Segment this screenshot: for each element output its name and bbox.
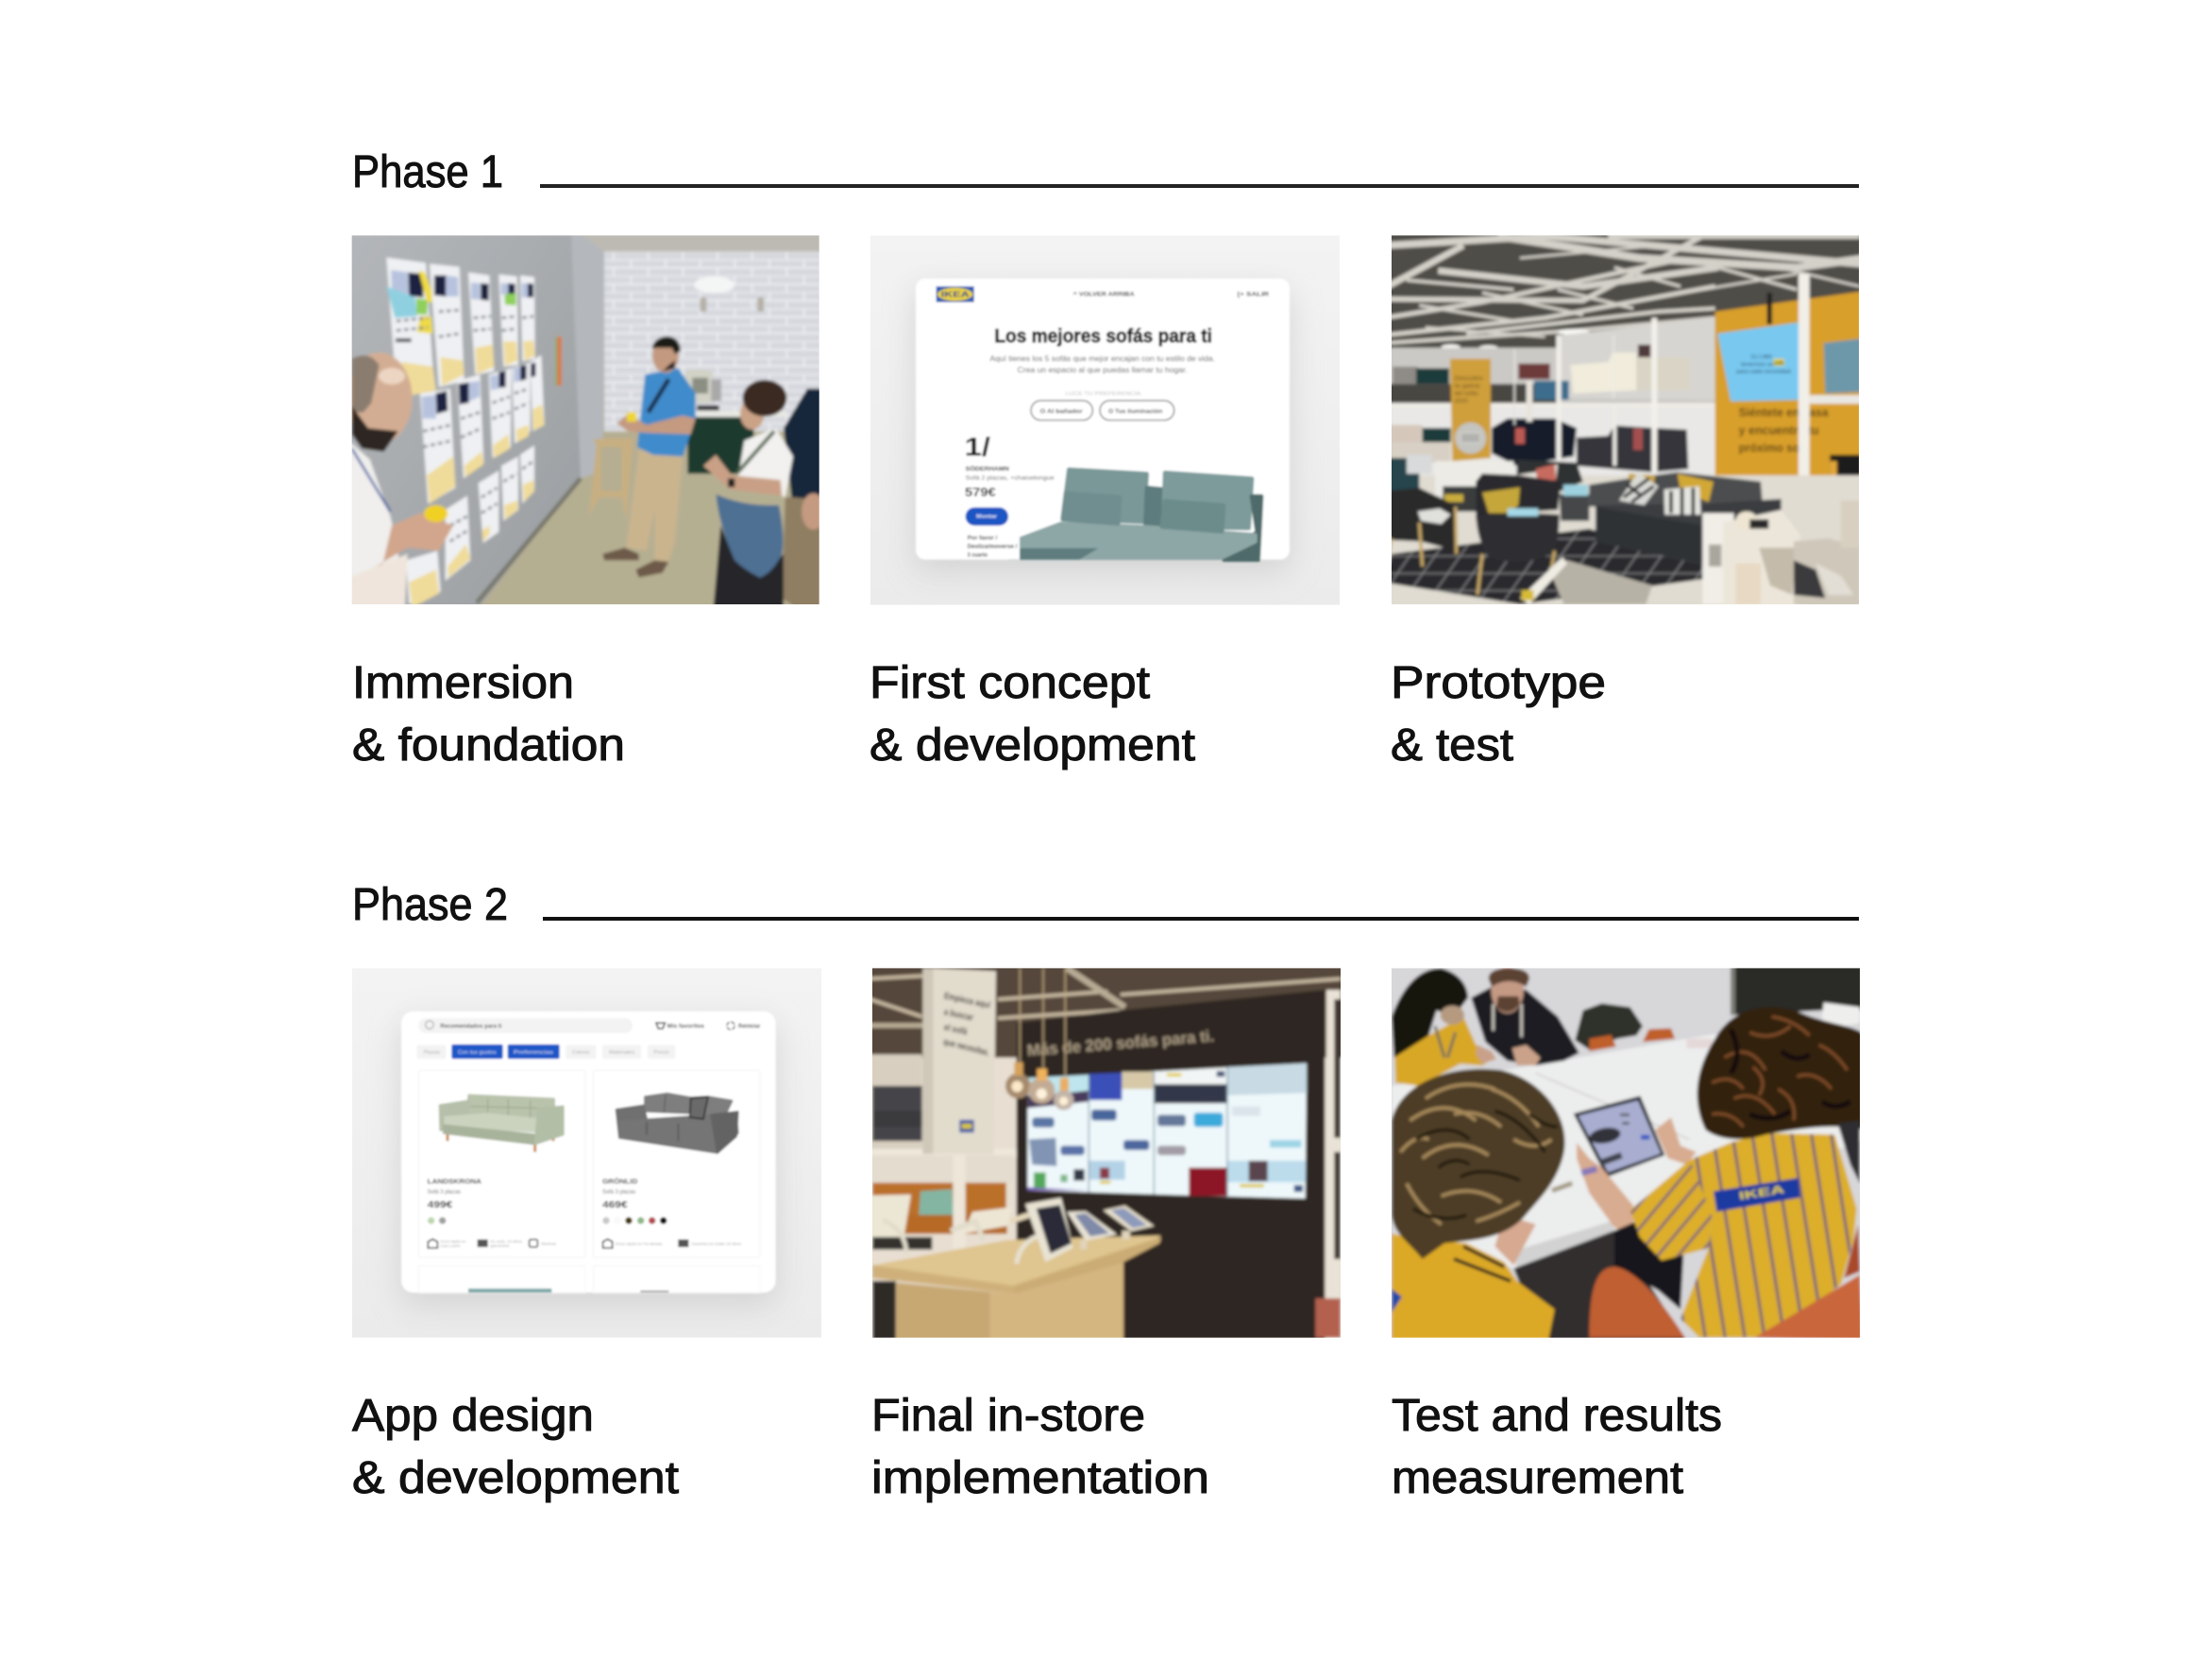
filter chips: Preferencias (514, 1050, 553, 1056)
photo: prototype in IKEA store showroom (1385, 227, 1866, 614)
app card: Crea un espacio al que puedas llamar tu hogar. (1018, 365, 1188, 374)
heading: Phase 1: Phase 1 (352, 147, 503, 197)
app card: SÖDERHAMN (966, 466, 1009, 473)
product card: LANDSKRONA: Su sofá, 10 años (490, 1239, 522, 1244)
caption: First concept & development: First concept (870, 658, 1150, 708)
IKEA logo (937, 286, 974, 302)
next row of product cards, cropped (466, 1287, 670, 1294)
app card: Por favor / (968, 535, 998, 541)
jacket and chairs behind table (1575, 1004, 1675, 1051)
caption: Prototype & test: & test (1391, 720, 1513, 771)
ceiling grid (1385, 227, 1866, 350)
search bar (418, 1018, 761, 1033)
product card: LANDSKRONA: 499€ (428, 1200, 453, 1211)
yellow banner left: 2020 (1455, 399, 1468, 405)
caption: Prototype & test (1391, 658, 1606, 771)
product card: LANDSKRONA (426, 1093, 566, 1250)
person with curly hair and striped IKEA shirt (1577, 1008, 1866, 1338)
app card: Sofá 2 plazas, +chaiselongue (966, 476, 1055, 482)
filter chips (417, 1044, 675, 1059)
orange chairs (1589, 1225, 1863, 1341)
photo: team reviewing wall of printed concepts (345, 227, 829, 617)
caption: Immersion & foundation: Immersion (352, 658, 574, 708)
woman in yellow shirt (1392, 968, 1496, 1086)
heading: Phase 2: Phase 2 (352, 880, 508, 930)
caption: Immersion & foundation: & foundation (352, 720, 625, 771)
product card: GRÖNLID (600, 1092, 742, 1250)
cushion bin and price tag (1520, 500, 1863, 614)
person in foreground with curly hair (1392, 1069, 1565, 1341)
caption: Test and results measurement (1392, 1391, 1722, 1503)
hanging sign: que necesitas. (942, 1037, 990, 1059)
caption: Prototype & test: Prototype (1391, 658, 1606, 708)
tablet kiosk counter (872, 1197, 1161, 1347)
rule: Phase 2 (543, 917, 1859, 921)
mezzanine shelving (1385, 318, 1718, 477)
product card: LANDSKRONA: garantía (490, 1244, 510, 1248)
table (1392, 1034, 1866, 1268)
app card: [+ SALIR (1238, 293, 1270, 298)
app card: LUCE TU PREFERENCIA (1065, 392, 1141, 398)
yellow banner left: del sofás (1455, 392, 1478, 398)
search bar: Reiniciar (738, 1024, 761, 1029)
rule: Phase 1 (540, 184, 1859, 188)
caption: Test and results measurement: measurement (1392, 1453, 1683, 1503)
hanging sign: el sofá (943, 1023, 969, 1038)
hanging sign: a buscar (943, 1008, 974, 1024)
dark wall (1017, 990, 1325, 1347)
filter pills (1031, 400, 1174, 420)
man looking at wall, foreground left (345, 352, 453, 617)
filter pills: O Al bañador (1040, 409, 1083, 415)
digital screen (1717, 323, 1798, 401)
sofa: grey (616, 1093, 738, 1153)
caption: Final in-store implementation: Final in-store (871, 1391, 1145, 1441)
app card (401, 1011, 776, 1293)
dark grey sofa (1589, 472, 1781, 564)
digital screen: para cada necesidad (1736, 369, 1791, 375)
product card: LANDSKRONA: expo y pick (441, 1244, 460, 1248)
product card: LANDSKRONA: LANDSKRONA (428, 1177, 481, 1185)
hanging sign: Empieza aquí (943, 991, 992, 1011)
tablet (1574, 1096, 1664, 1177)
product card: LANDSKRONA: Envío rápido en (441, 1239, 465, 1244)
yellow banner left: la gama (1455, 384, 1480, 390)
photo: final in-store installation with screens and tablets (866, 963, 1347, 1347)
yellow wall with screen: Siéntete en casa (1739, 406, 1830, 419)
hanging sign (922, 968, 996, 1260)
sofa (1007, 469, 1261, 560)
product card: GRÖNLID: Sofá 3 plazas (602, 1190, 635, 1195)
app card: Desliza/moverse / (968, 544, 1018, 550)
caption: App design & development (352, 1391, 679, 1503)
product card: GRÖNLID: Garantía en sofás 10 años (691, 1241, 741, 1245)
lower left room (866, 1149, 1017, 1341)
caption: Final in-store implementation: implementation (871, 1453, 1209, 1503)
digital screen: sofá (1774, 361, 1783, 366)
digital screen: tenemos un (1741, 363, 1774, 368)
sofa: green (440, 1095, 564, 1152)
woman in white shirt and apron (703, 380, 829, 614)
yellow wall with screen (1713, 272, 1859, 478)
caption: Test and results measurement: Test and results (1392, 1391, 1722, 1441)
caption: Immersion & foundation (352, 658, 625, 771)
product card: GRÖNLID: 469€ (602, 1200, 628, 1211)
filter chips: Materiales (609, 1050, 635, 1056)
app card: 3 cuarto (968, 552, 988, 558)
video wall (1027, 1063, 1307, 1198)
product card: LANDSKRONA: Retirar (541, 1241, 557, 1245)
wall posters (386, 258, 545, 607)
caption: App design & development: App design (352, 1391, 594, 1441)
digital screen: Es 1.800 (1751, 354, 1772, 360)
app card: 1/ (965, 432, 990, 462)
product card: GRÖNLID: GRÖNLID (602, 1177, 638, 1185)
caption: First concept & development (870, 658, 1195, 771)
wall headline: Más de 200 sofás para ti. (1026, 1026, 1215, 1059)
app card: 579€ (965, 485, 996, 500)
section: Phase 1 heading (352, 147, 1859, 197)
filter chips: Plazas (424, 1050, 440, 1056)
caption: App design & development: & development (352, 1453, 679, 1503)
filter chips: Con tus gustos (458, 1050, 497, 1056)
search bar: Recomendados para ti (440, 1023, 502, 1029)
IKEA logo: IKEA (941, 290, 971, 299)
app card: ^ VOLVER ARRIBA (1073, 293, 1135, 298)
screen mockup: app product listing (352, 968, 821, 1338)
blue button: Montar (976, 515, 997, 520)
pendant lamps (1005, 968, 1073, 1110)
product card: GRÖNLID: Envío rápido en Tus tiendas (616, 1241, 662, 1245)
showroom floor: rug, sofa and armchairs (1385, 455, 1866, 614)
app card: Los mejores sofás para ti (994, 327, 1212, 347)
section: Phase 2 heading (352, 880, 1859, 930)
person with curly hair and striped IKEA shirt: IKEA (1738, 1182, 1785, 1203)
app card (916, 279, 1290, 564)
photo: test session with IKEA staff and tablet (1385, 963, 1866, 1347)
ceiling (866, 963, 1347, 1149)
search bar: Mis favoritos (667, 1024, 705, 1029)
product card: LANDSKRONA: Sofá 3 plazas (428, 1190, 461, 1195)
yellow wall with screen: próximo sofá (1739, 441, 1811, 454)
yellow banner left: Descubre (1455, 377, 1483, 382)
filter pills: O Tus iluminación (1108, 409, 1163, 415)
caption: First concept & development: & development (870, 720, 1195, 771)
app card: Aquí tienes los 5 sofás que mejor encajan con tu estilo de vida. (989, 355, 1215, 364)
filter chips: Precio (654, 1050, 669, 1056)
yellow banner left (1450, 359, 1491, 461)
screen mockup: first concept web page (870, 235, 1340, 605)
filter chips: Colores (572, 1050, 590, 1056)
yellow wall with screen: y encuentra tu (1739, 424, 1819, 437)
caption: Final in-store implementation (871, 1391, 1209, 1503)
man in black hoodie (1471, 966, 1579, 1065)
blue button (966, 507, 1008, 526)
man in blue shirt (589, 336, 696, 578)
